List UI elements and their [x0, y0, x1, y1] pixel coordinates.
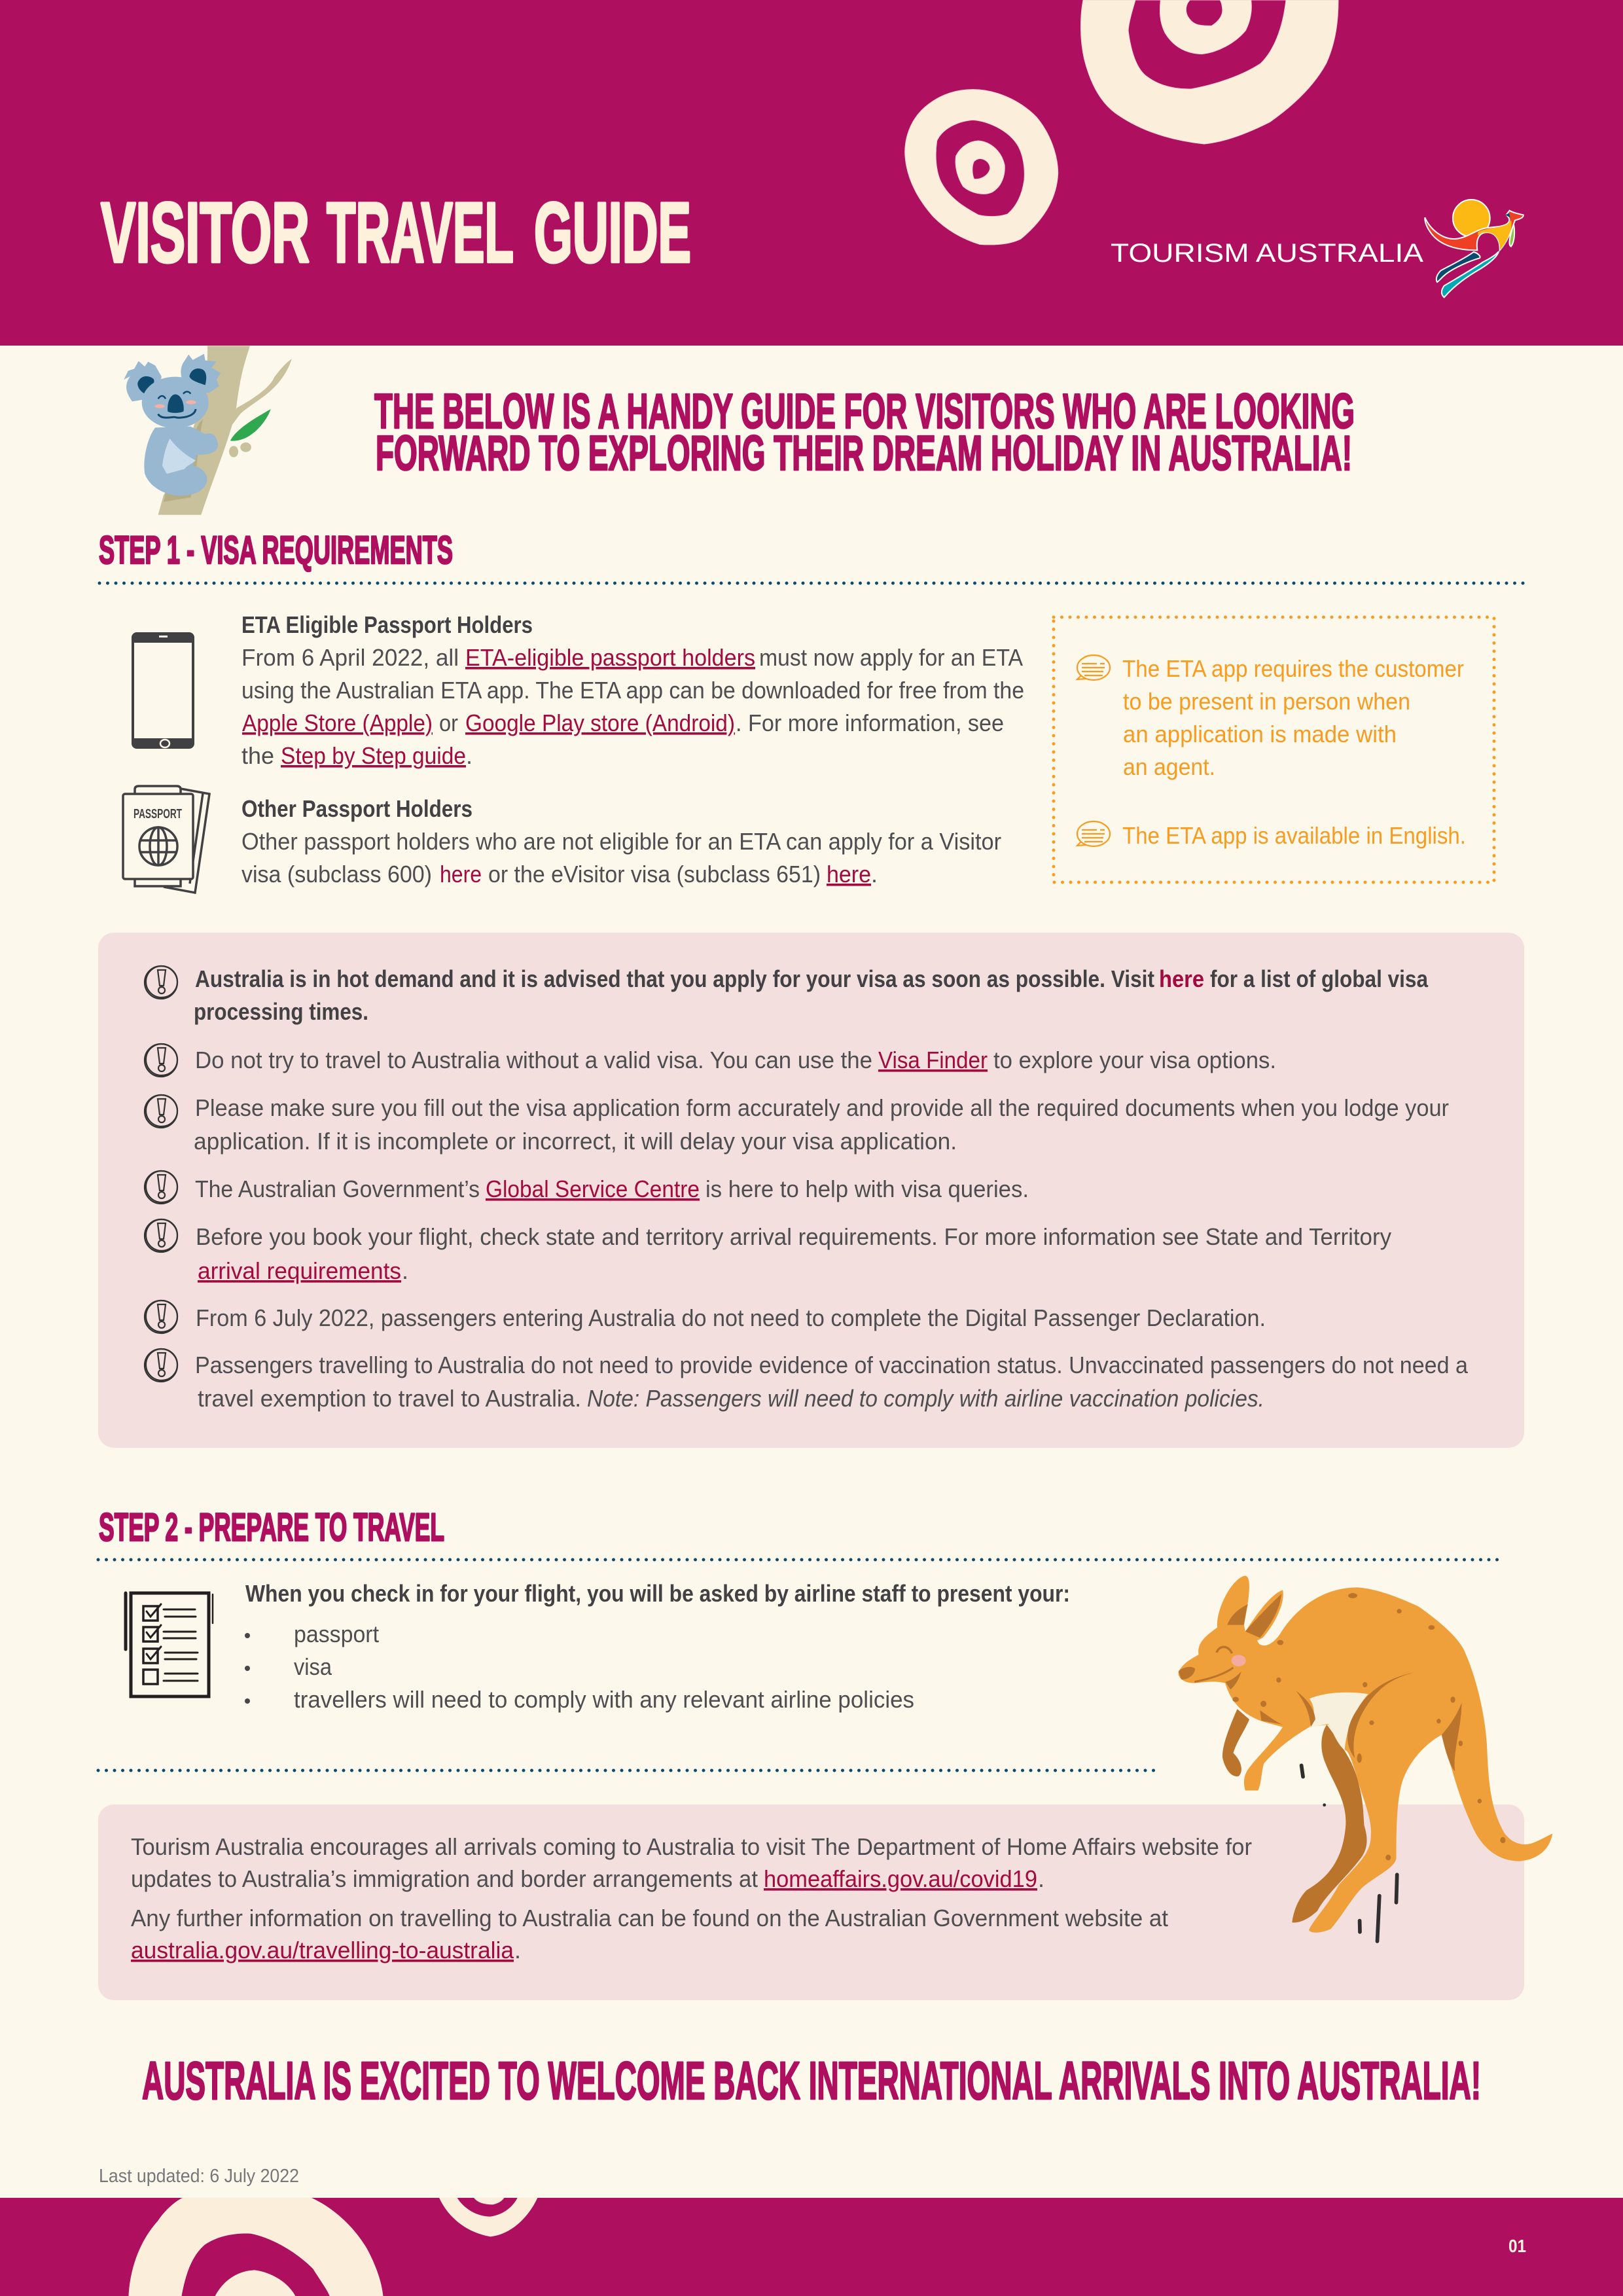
decorative dot-painting ring: small [905, 90, 1058, 245]
panel: further information: Tourism Australia encourages all arrivals coming to Australia to visit The Department of Home Affairs website for [131, 1833, 1252, 1860]
callout: ETA app notes: to be present in person when [1123, 688, 1410, 715]
step 1 heading: STEP 1 - VISA REQUIREMENTS [99, 528, 453, 572]
icon: passport [123, 786, 209, 893]
panel: further information: updates to Australia’s immigration and border arrangements at [131, 1865, 758, 1892]
block: ETA eligible passport holders [241, 611, 1024, 769]
header banner [0, 0, 1623, 346]
panel: visa warnings: Australia is in hot demand and it is advised that you apply for your visa as soon as possible. Visit [195, 965, 1154, 992]
icon: speech bubble [1077, 655, 1110, 680]
panel: further information: . [514, 1937, 521, 1964]
icon: alert [145, 1300, 177, 1333]
block: ETA eligible passport holders: ETA-eligible passport holders [465, 644, 755, 671]
callout: ETA app notes: an application is made with [1123, 721, 1397, 747]
block: ETA eligible passport holders: From 6 April 2022, all [241, 644, 459, 671]
panel: visa warnings: . [402, 1257, 408, 1284]
decorative ring: footer large [128, 2198, 383, 2296]
block: other passport holders [241, 795, 1001, 888]
block: ETA eligible passport holders: Google Play store (Android) [465, 709, 735, 736]
panel: visa warnings: Visa Finder [878, 1047, 988, 1073]
panel: visa warnings: here [1159, 965, 1204, 992]
block: other passport holders: visa (subclass 600) [241, 861, 432, 888]
block: check-in documents: When you check in for your flight, you will be asked by airline staff to present your: [245, 1580, 1070, 1607]
icon: alert [145, 1171, 177, 1204]
icon: alert [145, 1095, 177, 1128]
panel: visa warnings: application. If it is incomplete or incorrect, it will delay your visa application. [194, 1128, 957, 1155]
block: ETA eligible passport holders: or [439, 709, 458, 736]
bullet list: travellers will need to comply with any relevant airline policies [294, 1686, 914, 1713]
icon: alert [145, 1349, 177, 1382]
block: other passport holders: Other passport holders who are not eligible for an ETA can apply for a Visitor [241, 828, 1001, 855]
block: ETA eligible passport holders: Step by Step guide [281, 742, 466, 769]
intro heading [374, 384, 1355, 480]
callout: ETA app notes: The ETA app is available in English. [1122, 822, 1466, 849]
panel: further information: homeaffairs.gov.au/covid19 [764, 1865, 1037, 1892]
panel: visa warnings: arrival requirements [198, 1257, 401, 1284]
panel: visa warnings [98, 933, 1524, 1448]
callout: ETA app notes [1054, 617, 1494, 882]
block: ETA eligible passport holders: the [241, 742, 274, 769]
icon: checklist [126, 1593, 213, 1696]
bullet list: visa [294, 1653, 332, 1680]
panel: further information: Any further information on travelling to Australia can be found on the Australian Government website at [131, 1905, 1168, 1931]
block: other passport holders: here [440, 861, 482, 888]
block: ETA eligible passport holders: . For more information, see [736, 709, 1004, 736]
panel: visa warnings: Passengers travelling to Australia do not need to provide evidence of vaccination status. Unvaccinated passengers do not need a [195, 1352, 1469, 1378]
block: other passport holders: or the eVisitor visa (subclass 651) [488, 861, 821, 888]
illustration: koala on a gum tree [124, 346, 292, 515]
panel: further information: australia.gov.au/travelling-to-australia [131, 1937, 514, 1964]
block: check-in documents [245, 1580, 1070, 1713]
logo wordmark: TOURISM AUSTRALIA [1111, 239, 1423, 268]
icon: smartphone [133, 633, 193, 748]
title: VISITOR [101, 185, 310, 280]
panel: visa warnings: The Australian Government’s [195, 1175, 480, 1202]
block: ETA eligible passport holders: . [466, 742, 473, 769]
panel: visa warnings: for a list of global visa [1210, 965, 1429, 992]
title [101, 185, 691, 280]
block: ETA eligible passport holders: Apple Store (Apple) [242, 709, 433, 736]
step 2 heading: STEP 2 - PREPARE TO TRAVEL [99, 1505, 444, 1549]
decorative ring: footer small [439, 2198, 537, 2236]
panel: visa warnings: is here to help with visa queries. [705, 1175, 1029, 1202]
block: other passport holders: . [871, 861, 878, 888]
logo icon: kangaroo and sun [1425, 200, 1524, 297]
footer banner [0, 2198, 1623, 2296]
block: ETA eligible passport holders: using the Australian ETA app. The ETA app can be downloaded for free from the [241, 677, 1024, 704]
icon: alert [145, 966, 177, 999]
panel: further information: . [1038, 1865, 1044, 1892]
icon: passport: PASSPORT [134, 807, 182, 821]
illustration: jumping kangaroo [1179, 1576, 1552, 1941]
panel: visa warnings: Before you book your flight, check state and territory arrival requirements. For more information see State and Territory [196, 1223, 1391, 1250]
icon: speech bubble [1077, 821, 1110, 846]
icon: alert [145, 1044, 177, 1077]
panel: visa warnings: From 6 July 2022, passengers entering Australia do not need to complete the Digital Passenger Declaration. [196, 1304, 1266, 1331]
block: other passport holders: Other Passport Holders [241, 795, 473, 822]
title: GUIDE [534, 185, 691, 280]
panel: visa warnings: processing times. [194, 998, 368, 1025]
block: other passport holders: here [827, 861, 871, 888]
title: TRAVEL [327, 185, 514, 280]
panel: visa warnings: travel exemption to travel to Australia. [198, 1385, 581, 1412]
decorative dot-painting ring: large [1080, 0, 1338, 144]
icon: alert [145, 1219, 177, 1252]
block: ETA eligible passport holders: must now apply for an ETA [759, 644, 1023, 671]
last updated note: Last updated: 6 July 2022 [99, 2166, 299, 2187]
callout: ETA app notes: an agent. [1123, 753, 1215, 780]
panel: further information [98, 1804, 1524, 2000]
page number: 01 [1508, 2236, 1526, 2256]
bullet list: passport [294, 1621, 379, 1647]
block: ETA eligible passport holders: ETA Eligible Passport Holders [241, 611, 533, 638]
panel: visa warnings: Please make sure you fill out the visa application form accurately and provide all the required documents when you lodge your [195, 1094, 1449, 1121]
panel: visa warnings: to explore your visa options. [993, 1047, 1276, 1073]
bullet list [245, 1621, 914, 1713]
panel: visa warnings: Global Service Centre [486, 1175, 700, 1202]
callout: ETA app notes: The ETA app requires the customer [1122, 655, 1464, 682]
panel: visa warnings: Do not try to travel to Australia without a valid visa. You can use the [195, 1047, 872, 1073]
panel: visa warnings: Note: Passengers will need to comply with airline vaccination policies. [587, 1385, 1264, 1412]
